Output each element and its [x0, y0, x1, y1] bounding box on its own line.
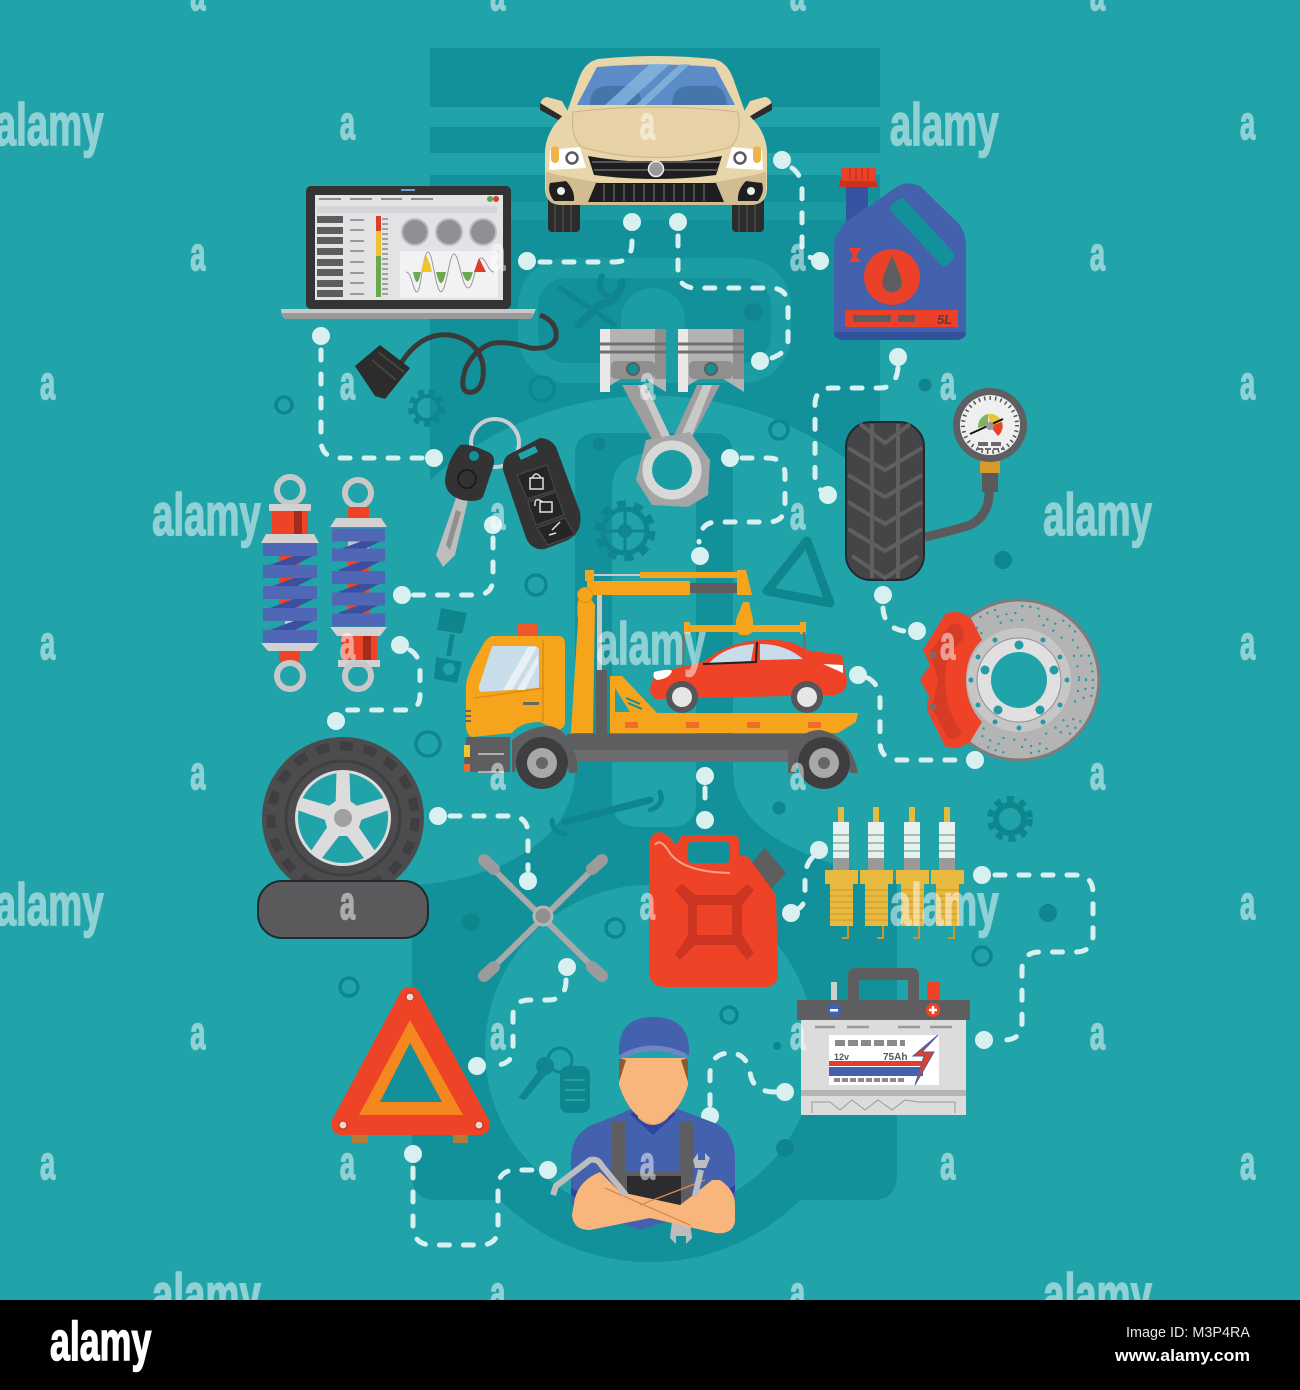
icon: red jerry can [649, 832, 786, 987]
alamy watermark text: aaaa [40, 617, 1256, 670]
alamy watermark text: aaa [340, 97, 1256, 150]
icon: beige car front view [540, 56, 772, 232]
alamy watermark text: aa [490, 1267, 806, 1320]
alamy watermark text: aaaaa [40, 357, 1256, 410]
icon: left shock absorber [261, 477, 319, 689]
icon: oil canister 5L [834, 168, 966, 340]
icon: warning triangle [332, 987, 490, 1143]
icon: engine pistons and connecting rods [600, 329, 744, 507]
alamy watermark text: alamy [890, 92, 999, 158]
icon: car wheel and flat tire [258, 737, 428, 938]
alamy watermark text: alamy [152, 1262, 261, 1328]
decorative icon: large gear [598, 504, 652, 558]
decorative icon: tools [560, 276, 622, 325]
icon: brake disc with red caliper [920, 600, 1099, 760]
icon: oil canister 5L: 5L [937, 312, 952, 327]
alamy watermark text: aa [490, 487, 806, 540]
icon: tire with pressure gauge [846, 388, 1027, 580]
alamy watermark text: alamy [152, 482, 261, 548]
alamy watermark text: aaaa [190, 747, 1105, 800]
alamy watermark text: aaa [340, 877, 1256, 930]
connector dots [321, 160, 984, 1170]
icon: car battery 12v 75Ah: 75Ah [883, 1052, 907, 1063]
decorative dark dots and rings [276, 312, 1048, 1148]
icon: car battery 12v 75Ah [797, 968, 970, 1115]
alamy watermark text: alamy [1043, 1262, 1152, 1328]
icon: car battery 12v 75Ah: 12v [834, 1052, 849, 1062]
alamy watermark text: alamy [890, 872, 999, 938]
decorative icon: small gear [411, 392, 443, 424]
icon: right shock absorber [330, 480, 387, 689]
icon: car keys with remote fob [436, 419, 580, 567]
footer bar [0, 1300, 1300, 1390]
dashed connectors [321, 168, 1093, 1245]
alamy watermark text: alamy [597, 611, 706, 677]
decorative icon: spanner [552, 792, 661, 834]
footer bar: alamy [50, 1310, 152, 1372]
icon: diagnostic laptop with OBD cable [281, 186, 556, 399]
alamy watermark text: alamy [1043, 482, 1152, 548]
decorative icon: warning triangle [767, 541, 830, 603]
icon: four spark plugs [825, 807, 964, 938]
alamy watermark text: aaaaa [40, 1137, 1256, 1190]
icon: tow truck with red car [464, 570, 858, 789]
footer bar: www.alamy.com [1114, 1346, 1250, 1365]
background engine piston silhouette [412, 48, 897, 1262]
footer bar: Image ID: M3P4RA [1126, 1324, 1250, 1341]
decorative icon: keys [518, 1048, 590, 1113]
icon: cross lug wrench [484, 860, 602, 976]
alamy watermark text: aaaa [190, 1007, 1105, 1060]
decorative icon: gear right [990, 799, 1030, 839]
icon: mechanic with tools [553, 1017, 735, 1244]
decorative icon: mini piston [434, 608, 467, 683]
alamy watermark text: aaaa [190, 228, 1105, 281]
